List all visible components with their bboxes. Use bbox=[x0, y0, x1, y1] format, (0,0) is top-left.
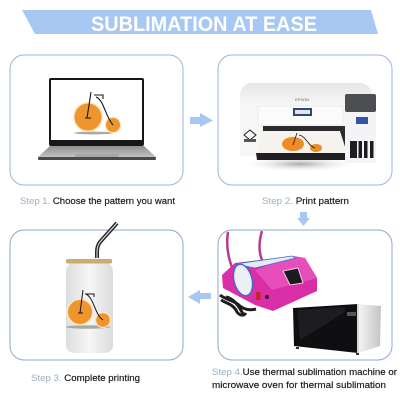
panel: step 2 printer bbox=[218, 55, 392, 185]
arrow: step 2 to step 4 bbox=[297, 212, 310, 226]
printed pattern bbox=[281, 133, 322, 152]
step 4 caption bbox=[212, 367, 397, 390]
panel: step 1 laptop bbox=[10, 55, 183, 185]
title banner bbox=[22, 10, 378, 36]
step 2 caption: Step 2. Print pattern bbox=[262, 196, 349, 206]
arrow: step 1 to step 2 bbox=[190, 113, 213, 127]
step 4 caption: microwave oven for thermal sublimation bbox=[212, 380, 386, 390]
panel: step 3 jar bbox=[10, 223, 183, 360]
icon: printer: EPSON bbox=[295, 97, 309, 102]
icon: printer bbox=[240, 83, 376, 172]
icon: power cord bbox=[220, 295, 256, 315]
icon: laptop bbox=[38, 78, 156, 160]
icon: pink mug press bbox=[222, 231, 317, 311]
icon: microwave oven bbox=[293, 304, 381, 355]
printer logo bbox=[244, 130, 256, 142]
icon: glass can with straw bbox=[66, 223, 117, 353]
panel: step 4 machines bbox=[218, 230, 392, 360]
arrow: step 4 to step 3 bbox=[188, 290, 211, 304]
orange bicycle artwork bbox=[73, 92, 121, 134]
step 1 caption: Step 1. Choose the pattern you want bbox=[20, 196, 176, 206]
title banner: SUBLIMATION AT EASE bbox=[91, 13, 317, 36]
step 4 caption: Step 4.Use thermal sublimation machine or bbox=[212, 367, 397, 377]
orange bicycle artwork bbox=[66, 290, 111, 329]
step 3 caption: Step 3. Complete printing bbox=[31, 373, 140, 383]
